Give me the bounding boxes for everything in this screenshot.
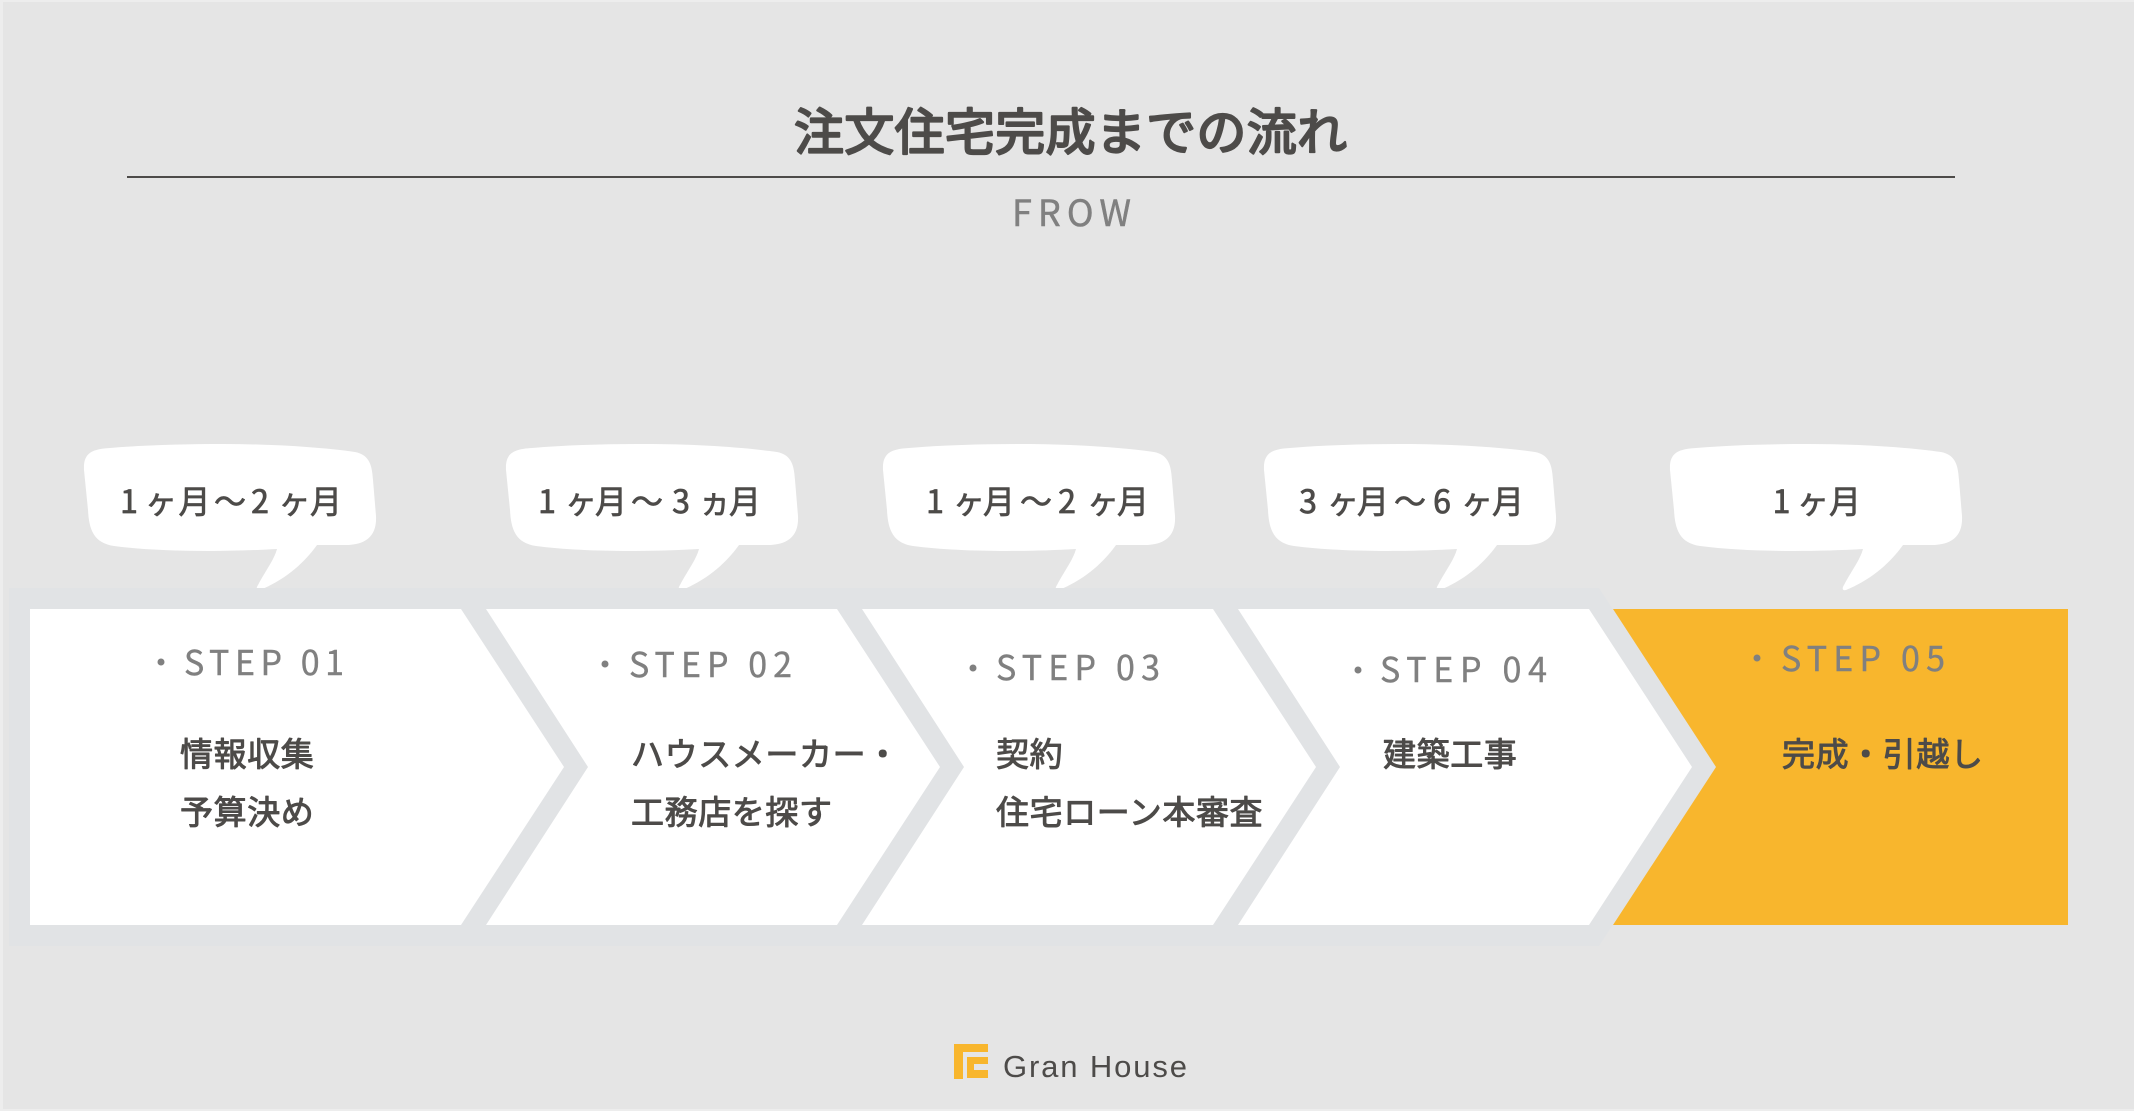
panel: step 1: 情報収集 — [180, 728, 314, 776]
speech bubble: step 3 duration — [883, 444, 1175, 590]
panel: step 3 — [862, 609, 1316, 925]
speech bubble: step 5 duration: 1ヶ月 — [1773, 477, 1861, 523]
panel: step 4: STEP 04 — [1380, 643, 1547, 692]
logo: Gran House — [954, 1044, 1187, 1084]
speech bubble: step 2 duration: 1ヶ月〜3ヵ月 — [538, 477, 761, 523]
panel: step 5: STEP 05 — [1781, 632, 1945, 681]
panel: step 2: STEP 02 — [629, 638, 792, 687]
speech bubble: step 4 duration — [1264, 444, 1556, 590]
speech bubble: step 3 duration: 1ヶ月〜2ヶ月 — [926, 477, 1149, 523]
speech bubble: step 1 duration — [84, 444, 376, 590]
chevron backing band — [9, 588, 1716, 946]
subtitle: FROW — [1012, 185, 1131, 237]
panel: step 2 — [486, 609, 940, 925]
title: 注文住宅完成までの流れ — [794, 93, 1347, 165]
speech bubble: step 4 duration: 3ヶ月〜6ヶ月 — [1299, 477, 1524, 523]
panel: step 2: ハウスメーカー・ — [631, 728, 900, 776]
panel: step 4 — [1238, 609, 1692, 925]
panel: step 3: STEP 03 — [996, 641, 1160, 690]
speech bubble: step 5 duration — [1670, 444, 1962, 590]
brand name: Gran House — [1003, 1049, 1187, 1084]
speech bubble: step 2 duration — [506, 444, 798, 590]
panel: step 5: 完成・引越し — [1782, 728, 1984, 776]
panel: step 5 — [1613, 609, 2068, 925]
speech bubble: step 1 duration: 1ヶ月〜2ヶ月 — [120, 477, 342, 523]
panel: step 1: STEP 01 — [184, 636, 344, 685]
panel: step 3: 住宅ローン本審査 — [996, 786, 1263, 834]
panel: step 4: 建築工事 — [1383, 728, 1517, 776]
icon: logo mark — [954, 1044, 988, 1079]
panel: step 2: 工務店を探す — [631, 786, 833, 834]
panel: step 1 — [30, 609, 564, 925]
panel: step 1: 予算決め — [180, 786, 314, 834]
panel: step 3: 契約 — [996, 728, 1063, 776]
